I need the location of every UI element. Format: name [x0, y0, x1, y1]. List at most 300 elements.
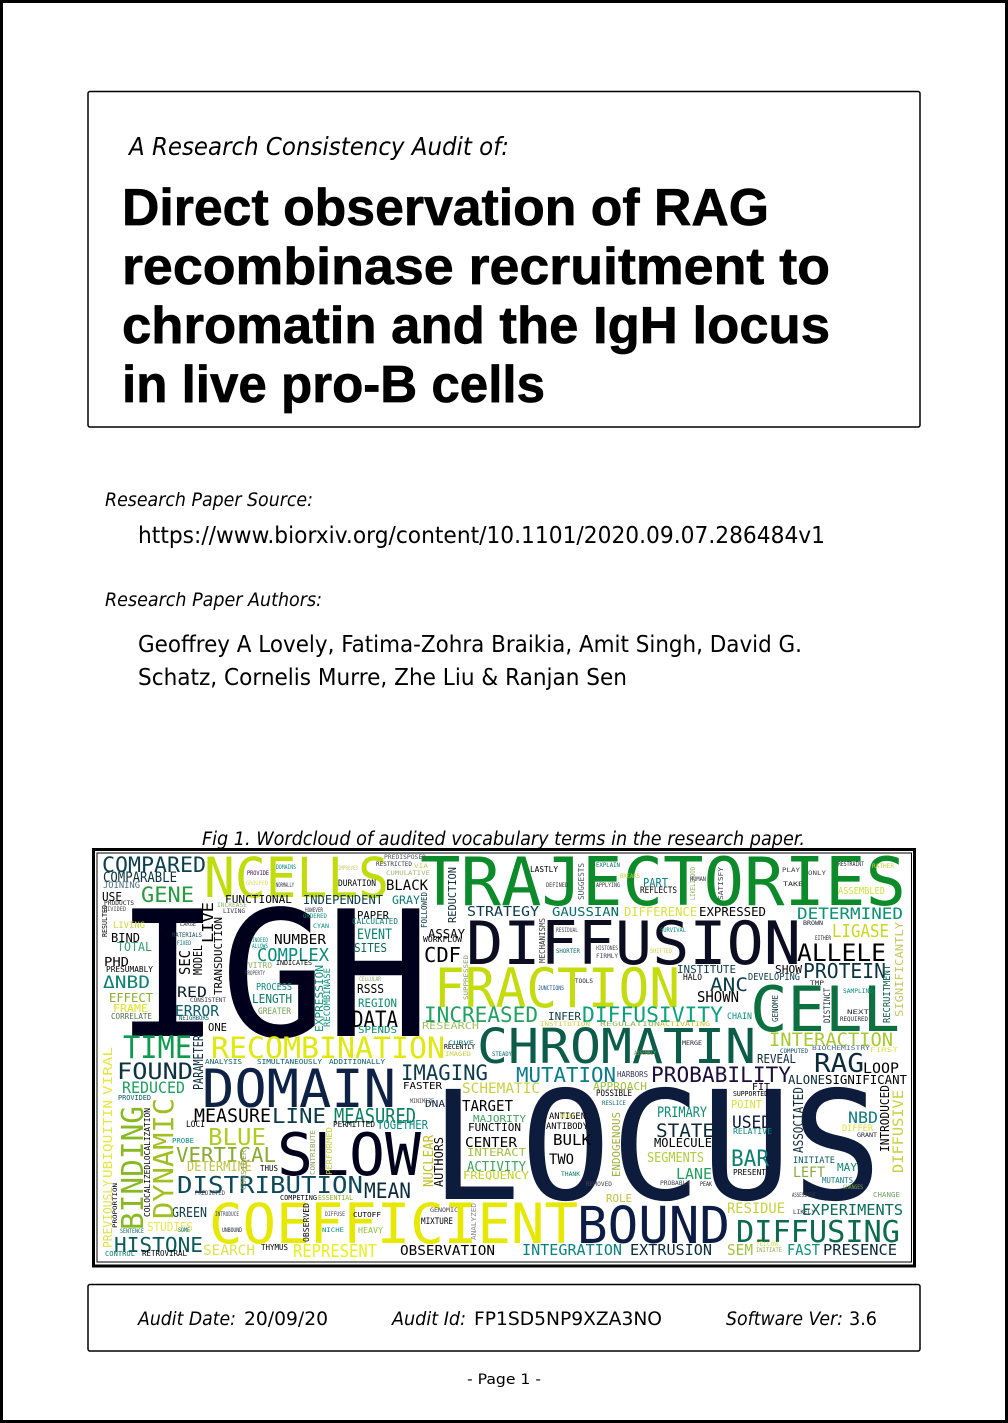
small filler terms: CYAN: [313, 922, 329, 930]
medium terms: COMPLEX: [257, 945, 329, 966]
small filler terms: GROUPED: [246, 879, 268, 887]
medium terms: RESIDUE: [727, 1201, 785, 1217]
medium terms: EFFECT: [109, 991, 153, 1005]
medium terms: GRANT: [857, 1132, 877, 1139]
small filler terms: TAKE: [783, 880, 803, 888]
small filler terms: SENTENCE: [120, 1227, 144, 1235]
medium terms: FAST: [787, 1241, 820, 1259]
medium terms: FOUND: [117, 1060, 193, 1085]
small filler terms: REGULATION: [600, 1020, 660, 1028]
medium terms: REVEAL: [757, 1052, 796, 1066]
authors list: Geoffrey A Lovely, Fatima-Zohra Braikia, Amit Singh, David G.: [138, 632, 802, 658]
word: NCELLS: NCELLS: [204, 846, 389, 910]
medium terms: DIFFUSIVITY: [582, 1003, 723, 1027]
medium terms: PROVIDED: [118, 1094, 151, 1102]
medium terms: INTERACT: [467, 1146, 526, 1159]
medium terms: SEGMENTS: [647, 1151, 704, 1166]
medium terms: JOINING: [103, 881, 140, 891]
small filler terms: CELLULAR: [359, 975, 381, 983]
vertical terms: RESULTED: [101, 905, 109, 937]
small filler terms: IMPROVED: [338, 864, 358, 872]
small filler terms: LIKELY: [793, 1208, 815, 1216]
small filler terms: EITHER: [815, 934, 831, 942]
audit id: [390, 1308, 662, 1330]
small filler terms: PREDICTED: [195, 1189, 225, 1197]
word: CELL: CELL: [750, 973, 900, 1046]
medium terms: RESEARCH: [422, 1021, 479, 1032]
audit kicker: A Research Consistency Audit of:: [127, 132, 509, 161]
medium terms: NBD: [848, 1108, 878, 1127]
small filler terms: FIRST: [870, 1046, 898, 1054]
medium terms: FREQUENCY: [463, 1169, 529, 1182]
vertical terms: DIFFUSIVE: [891, 1090, 907, 1173]
medium terms: REGION: [358, 996, 397, 1010]
word: RECOMBINATION: RECOMBINATION: [211, 1031, 445, 1065]
medium terms: DATA: [352, 1008, 398, 1033]
medium terms: DNA: [425, 1099, 445, 1110]
medium terms: REFLECTS: [640, 886, 677, 896]
medium terms: NUMBER: [274, 933, 326, 948]
medium terms: MUTANTS: [822, 1176, 853, 1185]
medium terms: MAY: [837, 1161, 857, 1174]
word: SLOW: SLOW: [277, 1120, 421, 1189]
vertical terms: [101, 863, 907, 1248]
small filler terms: RESLICE: [602, 1099, 626, 1107]
word: COEFFICIENT: COEFFICIENT: [209, 1192, 578, 1256]
medium terms: GREEN: [172, 1206, 207, 1221]
medium terms: CONTROL: [105, 1250, 135, 1258]
audit id: Audit Id:: [390, 1308, 466, 1330]
medium terms: VERTICAL: [176, 1143, 276, 1167]
word: DOMAIN: DOMAIN: [202, 1059, 396, 1120]
small filler terms: SURVIVAL: [660, 926, 686, 934]
medium terms: FIT: [752, 1082, 770, 1093]
medium terms: LIGASE: [832, 921, 889, 942]
medium terms: DURATION: [338, 879, 376, 889]
vertical terms: AUTHORS: [432, 1137, 446, 1187]
medium terms: TWO: [549, 1152, 574, 1168]
medium terms: RETROVIRAL: [142, 1249, 187, 1258]
medium terms: POINT: [731, 1099, 763, 1111]
vertical terms: RECRUITMENT: [882, 965, 893, 1023]
small filler terms: VIA: [414, 862, 428, 870]
small filler terms: ALLOWS: [252, 942, 268, 950]
small filler terms: SAMPLING: [843, 987, 873, 995]
vertical terms: ENDOGENOUS: [610, 1112, 623, 1177]
small filler terms: GENOMIC: [430, 1206, 458, 1214]
audit date: Audit Date:: [136, 1308, 236, 1330]
medium terms: LEFT: [793, 1165, 826, 1181]
medium terms: LOCI: [186, 1120, 205, 1130]
audit date: [136, 1308, 328, 1330]
vertical terms: OBSERVED: [302, 1203, 311, 1242]
small filler terms: ASSEMBLY: [634, 1049, 656, 1057]
vertical terms: EXPRESSION: [313, 965, 326, 1032]
page number: - Page 1 -: [467, 1372, 541, 1388]
small filler terms: INITIATE: [756, 1246, 782, 1254]
medium terms: SIMULTANEOUSLY: [257, 1058, 323, 1066]
small filler terms: INDEED: [252, 936, 268, 944]
word: TRAJECTORIES: TRAJECTORIES: [420, 843, 906, 921]
medium terms: LANE: [676, 1165, 712, 1183]
small filler terms: ORDERED: [303, 912, 327, 920]
vertical terms: INTRODUCED: [878, 1085, 892, 1152]
medium terms: THYMUS: [261, 1243, 288, 1252]
small filler terms: INTRODUCE: [215, 1210, 239, 1218]
medium terms: LENGTH: [252, 992, 292, 1006]
medium terms: COMPARABLE: [103, 870, 177, 886]
medium terms: PRESENCE: [823, 1241, 897, 1259]
medium terms: MEASURE: [194, 1105, 271, 1127]
small filler terms: DIFFUSE: [325, 1210, 345, 1218]
small filler terms: CURVE: [448, 1039, 474, 1047]
medium terms: PRESUMABLY: [106, 965, 153, 974]
medium terms: MOLECULE: [654, 1135, 712, 1150]
medium terms: EXTRUSION: [630, 1241, 712, 1259]
medium terms: ANTIBODY: [546, 1122, 589, 1132]
small filler terms: HISTONES: [596, 944, 618, 952]
medium terms: SCHEMATIC: [462, 1081, 540, 1097]
medium terms: EXPRESSED: [699, 905, 766, 919]
word: CHROMATIN: CHROMATIN: [477, 1019, 756, 1075]
medium terms: PRIMARY: [657, 1105, 707, 1121]
small filler terms: APPLYING: [596, 881, 620, 889]
small filler terms: TMP: [810, 979, 824, 987]
medium terms: PROBABILITY: [651, 1063, 791, 1087]
medium terms: USED: [732, 1113, 771, 1133]
small filler terms: PREDISPOSED: [384, 853, 426, 861]
source label: Research Paper Source:: [105, 489, 313, 511]
small filler terms: PEAK: [700, 1180, 712, 1188]
medium terms: APPROACH: [593, 1081, 647, 1093]
vertical terms: GENOME: [771, 995, 780, 1022]
medium terms: RELATIVE: [733, 1127, 772, 1136]
medium terms: GENE: [141, 883, 194, 907]
small filler terms: MINIMIZE: [410, 1097, 434, 1105]
small filler terms: RESTRAINT: [838, 860, 864, 868]
medium terms: STRATEGY: [467, 905, 539, 920]
medium terms: CHAIN: [727, 1012, 752, 1022]
vertical terms: CONTRIBUTE: [309, 1130, 317, 1175]
medium terms: MEAN: [364, 1179, 411, 1203]
small filler terms: INCREASE: [217, 901, 247, 909]
medium terms: INITIATE: [793, 1156, 835, 1166]
medium terms: INTEGRATION: [522, 1241, 622, 1259]
audit date: 20/09/20: [244, 1308, 328, 1330]
small filler terms: NEXT: [847, 1008, 869, 1016]
medium terms: MUTATION: [516, 1063, 616, 1087]
medium terms: PAPER: [357, 909, 389, 922]
small filler terms: FIRMLY: [596, 952, 618, 960]
medium terms: INTERACTION: [769, 1029, 893, 1051]
vertical terms: UBIQUITIN: [101, 1100, 115, 1178]
small filler terms: IMAGED: [445, 1050, 471, 1058]
software version: Software Ver:: [726, 1308, 843, 1330]
audit id: FP1SD5NP9XZA3NO: [474, 1308, 662, 1330]
medium terms: VITRO: [248, 961, 273, 970]
medium terms: SEARCH: [203, 1243, 255, 1259]
small filler terms: CHANGES: [843, 1183, 863, 1191]
vertical terms: CONSIDER: [240, 1149, 248, 1190]
vertical terms: SUGGESTS: [577, 863, 586, 900]
small filler terms: JUNCTIONS: [538, 984, 564, 992]
vertical terms: SEC: [176, 950, 194, 975]
medium terms: DEVELOPING: [748, 972, 800, 983]
medium terms: BLUE: [208, 1125, 266, 1151]
medium terms: HEAVY: [358, 1226, 383, 1235]
word: TIME: TIME: [123, 1030, 192, 1066]
medium terms: DIFFER: [842, 1124, 874, 1134]
wordcloud terms: [101, 843, 907, 1262]
medium terms: LINE: [272, 1104, 326, 1128]
medium terms: ANALYSIS: [205, 1058, 242, 1066]
medium terms: SUPPORTED: [733, 1090, 768, 1098]
medium terms: PROCESS: [256, 982, 292, 993]
vertical terms: FOLLOWED: [420, 892, 429, 928]
medium terms: THUS: [260, 1164, 278, 1173]
vertical terms: BINDING: [116, 1106, 151, 1230]
medium terms: EVENT: [357, 927, 392, 943]
vertical terms: SIGNIFICANTLY: [893, 922, 906, 1017]
small filler terms: BROWN: [803, 919, 823, 927]
medium terms: FRAME: [113, 1002, 148, 1015]
small filler terms: TOOLS: [575, 977, 593, 985]
medium terms: BAR: [731, 1147, 770, 1172]
vertical terms: ANALYZED: [470, 1203, 478, 1240]
medium terms: EXPERIMENTS: [802, 1201, 903, 1219]
small filler terms: ONLY: [808, 869, 826, 877]
medium terms: MAJORITY: [473, 1114, 526, 1125]
medium terms: INSTITUTE: [677, 963, 736, 976]
small filler terms: BIOCHEMISTRY: [812, 1044, 870, 1052]
small filler terms: DOMAINS: [276, 863, 296, 871]
authors list: [138, 632, 802, 691]
medium terms: FUNCTIONAL: [225, 893, 292, 906]
small filler terms: PLAY: [782, 866, 800, 874]
medium terms: FUNCTION: [468, 1121, 521, 1134]
medium terms: ROLE: [606, 1192, 632, 1205]
medium terms: PHD: [104, 955, 129, 969]
medium terms: GRAY: [392, 893, 420, 907]
medium terms: ANTIGEN: [549, 1112, 586, 1122]
small filler terms: LIVING: [223, 907, 245, 915]
medium terms: RSSS: [357, 981, 384, 996]
medium terms: MIXTURE: [421, 1217, 453, 1227]
small filler terms: ACTIVATING: [660, 1020, 710, 1028]
small filler terms: INSTITUTION: [540, 1020, 590, 1028]
small filler terms: ASSESSMENT: [792, 1191, 816, 1199]
small filler terms: REQUIRED: [840, 1015, 868, 1023]
wordcloud figure: [94, 843, 914, 1266]
small filler terms: DEFINED: [546, 881, 568, 889]
small filler terms: EXPLAIN: [596, 861, 620, 869]
small filler terms: SHIFTED: [650, 947, 672, 955]
medium terms: RAG: [814, 1049, 864, 1079]
small filler terms: LARGE: [180, 920, 196, 928]
medium terms: COMPETING: [280, 1194, 317, 1202]
medium terms: CENTER: [465, 1136, 517, 1151]
medium terms: FASTER: [403, 1081, 442, 1092]
medium terms: PROTEIN: [803, 959, 886, 983]
medium terms: HISTONE: [114, 1233, 203, 1257]
medium terms: CDF: [424, 943, 461, 967]
medium terms: DISTRIBUTION: [177, 1173, 363, 1199]
small filler terms: PROPERTY: [245, 969, 265, 977]
vertical terms: PREVIOUSLY: [101, 1179, 115, 1248]
small filler terms: CONSISTENT: [190, 996, 226, 1004]
vertical terms: SUPPRESSED: [463, 955, 470, 1000]
medium terms: GREATER: [258, 1007, 292, 1017]
word: BOUND: BOUND: [577, 1197, 730, 1256]
title panel: [88, 92, 920, 427]
medium terms: THANK: [561, 1170, 580, 1178]
small filler terms: PROVIDE: [247, 869, 269, 877]
word: FRACTION: FRACTION: [434, 957, 680, 1020]
medium terms: ESSENTIAL: [318, 1194, 353, 1202]
authors list: Schatz, Cornelis Murre, Zhe Liu & Ranjan Sen: [138, 665, 627, 691]
medium terms: PRESENT: [733, 1168, 767, 1177]
medium terms: ADDITIONALLY: [329, 1058, 386, 1066]
small filler terms: MATERIALS: [172, 931, 202, 939]
medium terms: MEASURED: [334, 1104, 416, 1128]
medium terms: RED: [177, 985, 207, 1001]
medium terms: BLACK: [386, 878, 429, 894]
vertical terms: ASSOCIATED: [792, 1087, 807, 1153]
medium terms: HALO: [683, 973, 702, 983]
medium terms: PERMITTED: [333, 1120, 375, 1129]
medium terms: SHOWN: [697, 988, 739, 1006]
medium terms: LIVING: [113, 921, 145, 931]
small filler terms: RESTRICTED: [376, 860, 412, 868]
medium terms: LOOP: [863, 1061, 899, 1077]
small filler terms: HOWEVER: [305, 906, 323, 914]
medium terms: TARGET: [462, 1097, 513, 1115]
paper title: [122, 179, 830, 414]
medium terms: INCREASED: [424, 1003, 538, 1027]
vertical terms: LIKELIHOOD: [689, 867, 697, 900]
medium terms: USE: [102, 890, 122, 904]
vertical terms: REDUCTION: [446, 867, 459, 923]
small filler terms: PRODUCTS: [104, 899, 134, 907]
medium terms: BIND: [111, 931, 140, 945]
small filler terms: RESIDUAL: [556, 926, 578, 934]
small filler terms: HUMAN: [690, 875, 706, 883]
vertical terms: MECHANISMS: [538, 918, 547, 963]
medium terms: CHANGE: [873, 1191, 900, 1199]
medium terms: INDEPENDENT: [303, 893, 383, 907]
medium terms: SIGNIFICANT: [825, 1073, 907, 1087]
small filler terms: FIXED: [177, 939, 191, 947]
paper title: in live pro-B cells: [122, 356, 545, 414]
paper title: chromatin and the IgH locus: [122, 297, 830, 355]
medium terms: BULK: [553, 1131, 591, 1149]
medium terms: STATE: [656, 1120, 714, 1142]
medium terms: TOGETHER: [377, 1118, 429, 1132]
vertical terms: PERFORMED: [325, 1127, 334, 1175]
medium terms: SPENDS: [358, 1025, 397, 1036]
paper title: Direct observation of RAG: [122, 179, 769, 237]
word: DIFFUSION: DIFFUSION: [466, 909, 801, 979]
small filler terms: PROBABLY: [660, 1179, 690, 1187]
vertical terms: MODEL: [191, 945, 205, 975]
small filler terms: YELLOW: [756, 1240, 778, 1248]
medium terms: WORKFLOW: [423, 935, 463, 944]
paper title: recombinase recruitment to: [122, 238, 830, 296]
vertical terms: RECOMBINASE: [323, 968, 333, 1027]
medium terms: OBSERVATION: [400, 1243, 495, 1259]
medium terms: REPRESENT: [293, 1241, 377, 1262]
small filler terms: RATHER: [872, 862, 894, 870]
footer panel: [88, 1284, 920, 1351]
medium terms: HARBORS: [617, 1070, 648, 1079]
small filler terms: NORMALLY: [276, 881, 294, 889]
small filler terms: ORDER: [560, 1112, 574, 1120]
small filler terms: NICHE: [322, 1226, 344, 1234]
vertical terms: PARAMETER: [192, 1035, 207, 1090]
medium terms: LASTLY: [530, 865, 558, 874]
vertical terms: DISTINCT: [823, 988, 833, 1023]
source url: https://www.biorxiv.org/content/10.1101/2020.09.07.286484v1: [138, 523, 825, 549]
medium terms: SHOW: [775, 963, 802, 976]
small filler terms: SHORTER: [556, 947, 580, 955]
medium terms: REDUCED: [122, 1078, 185, 1097]
medium terms: DETERMINED: [797, 904, 903, 923]
vertical terms: COLOCALIZEDLOCALIZATION: [143, 1108, 152, 1217]
medium terms: CALCULATED: [352, 917, 398, 926]
small filler terms: SOME: [178, 1226, 190, 1234]
authors label: Research Paper Authors:: [105, 589, 322, 611]
vertical terms: SATISFY: [717, 866, 725, 900]
vertical terms: NUCLEAR: [422, 1135, 437, 1187]
medium terms: ASSEMBLED: [838, 886, 885, 897]
medium terms: SITES: [354, 941, 387, 955]
small filler terms: MERGE: [682, 1039, 702, 1047]
vertical terms: VIRAL: [101, 1047, 115, 1095]
medium terms: ALONE: [788, 1073, 825, 1087]
medium terms: CORRELATE: [111, 1012, 152, 1021]
vertical terms: PROPORTION: [111, 1183, 119, 1228]
medium terms: ΔNBD: [103, 973, 150, 993]
medium terms: ASSAY: [428, 927, 466, 941]
medium terms: DIFFUSING: [736, 1215, 900, 1250]
small filler terms: STEADY: [492, 1050, 512, 1058]
vertical terms: TRANSDUCTION: [212, 917, 225, 995]
small filler terms: UNBOUND: [222, 1226, 242, 1234]
small filler terms: [104, 853, 898, 1254]
medium terms: SEM: [727, 1241, 753, 1259]
medium terms: DIFFERENCE: [624, 905, 697, 919]
medium terms: ONE: [208, 1021, 227, 1034]
medium terms: ACTIVITY: [467, 1160, 526, 1175]
medium terms: DETERMINE: [187, 1160, 252, 1175]
medium terms: CUTOFF: [353, 1211, 381, 1219]
vertical terms: DYNAMIC: [147, 1098, 180, 1219]
small filler terms: REMOVED: [586, 1180, 612, 1188]
medium terms: GAUSSIAN: [552, 904, 619, 919]
medium terms: [102, 853, 907, 1262]
medium terms: TOTAL: [117, 940, 152, 954]
medium terms: STUDIES: [147, 1220, 193, 1234]
medium terms: PART: [643, 876, 668, 890]
word: LOCUS: LOCUS: [430, 1059, 882, 1235]
word: IGH: IGH: [115, 875, 431, 1078]
vertical terms: LIVE: [199, 902, 217, 943]
small filler terms: BREAKS: [620, 872, 640, 880]
medium terms: INDICATES: [276, 959, 312, 967]
medium terms: INFER: [548, 1010, 581, 1023]
small filler terms: NEIGHBORS: [179, 1014, 209, 1022]
medium terms: RECENTLY: [444, 1043, 476, 1051]
